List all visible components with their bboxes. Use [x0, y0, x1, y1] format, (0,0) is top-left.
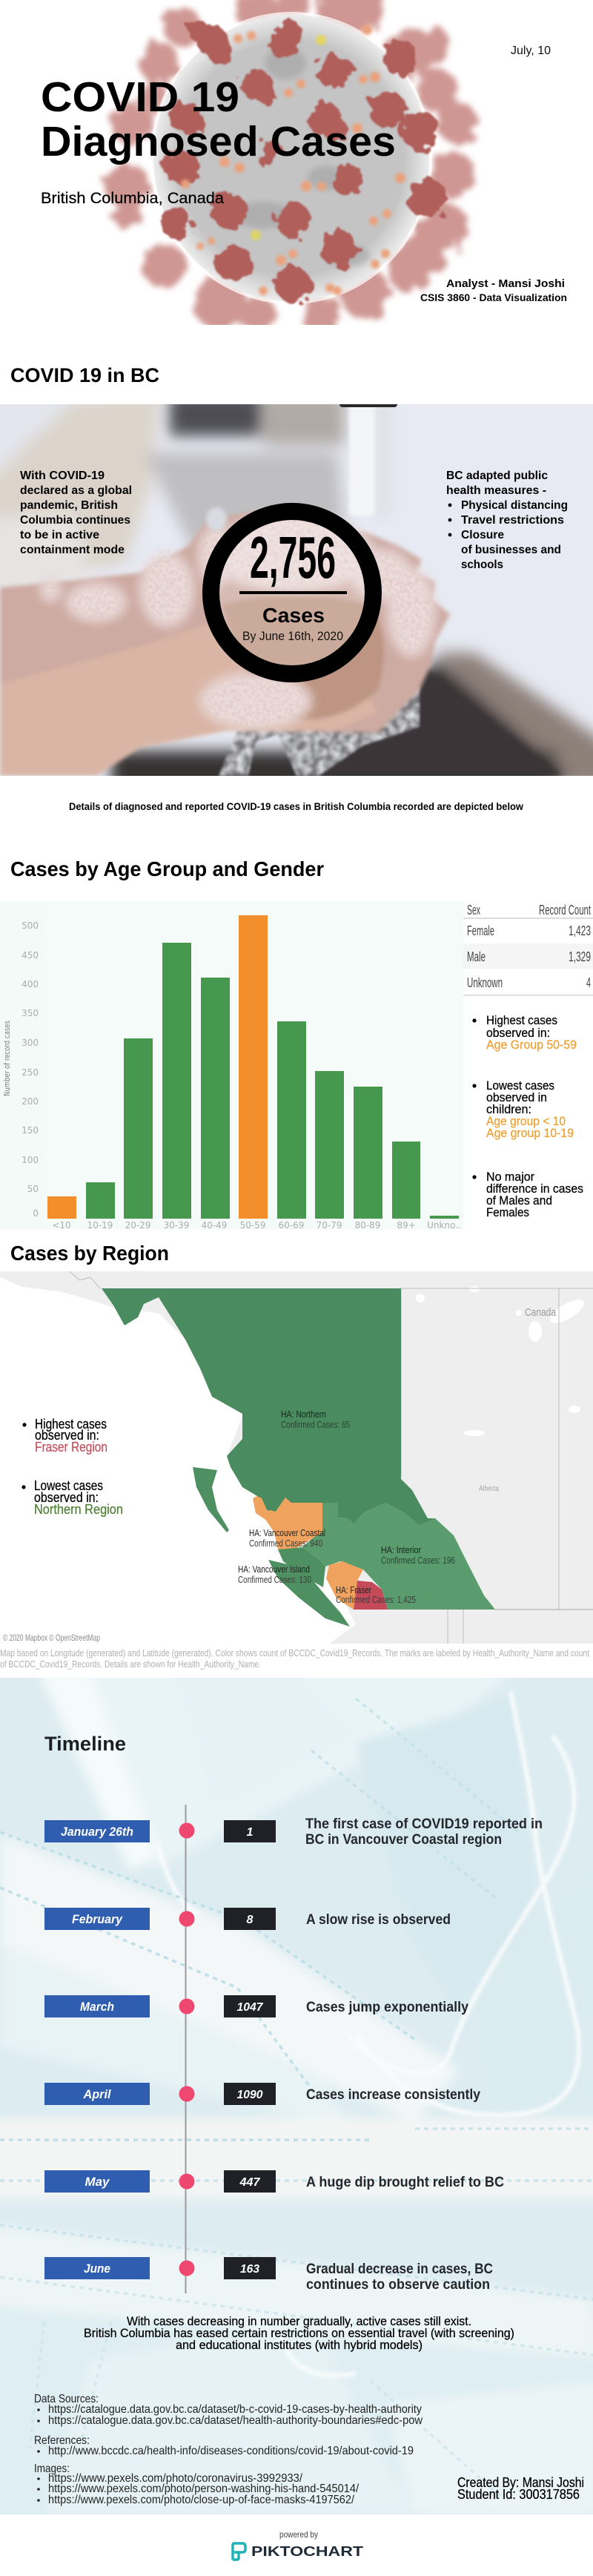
age group takeaways: observed in: [486, 1090, 547, 1104]
powered by footer: [233, 2529, 363, 2560]
hero panel: [41, 0, 567, 335]
y axis labels: 150: [21, 1125, 39, 1136]
y axis labels: 450: [21, 950, 39, 961]
closing statement: and educational institutes (with hybrid models): [176, 2338, 423, 2352]
left text block: containment mode: [20, 544, 125, 556]
age group takeaways: Highest cases: [486, 1013, 557, 1027]
closing statement: [84, 2314, 514, 2352]
x axis labels: 10-19: [87, 1220, 113, 1231]
map caption: [0, 1648, 589, 1670]
right text block: of businesses and: [461, 544, 561, 556]
row: February: February: [72, 1912, 123, 1926]
age group takeaways: Age group 10-19: [486, 1126, 574, 1140]
sources and references: http://www.bccdc.ca/health-info/diseases-conditions/covid-19/about-covid-19: [48, 2445, 414, 2457]
y axis labels: 350: [21, 1008, 39, 1018]
title: COVID 19: [41, 73, 239, 121]
map labels: Canada: [525, 1306, 557, 1319]
map labels: HA: Northern: [281, 1409, 326, 1420]
row: May: 447: [239, 2176, 261, 2189]
icon: piktochart logo: [233, 2543, 245, 2560]
age group takeaways: [473, 1013, 583, 1219]
sources and references: References:: [34, 2434, 90, 2447]
y axis labels: 100: [21, 1155, 39, 1165]
region: Fraser: [354, 1581, 388, 1610]
handwashing photo illustration: [0, 393, 593, 795]
left text block: With COVID-19: [20, 470, 105, 482]
right text block: Travel restrictions: [461, 514, 564, 527]
row: April: 1090: [237, 2089, 263, 2101]
sources and references: https://catalogue.data.gov.bc.ca/dataset/health-authority-boundaries#edc-pow: [48, 2414, 423, 2427]
bars: [47, 915, 459, 1219]
water splash: [219, 686, 420, 776]
closing statement: British Columbia has eased certain restrictions on essential travel (with screening): [84, 2326, 514, 2340]
bar chart: cases by age group: [0, 901, 463, 1231]
region takeaways: [22, 1417, 123, 1517]
x axis labels: 60-69: [279, 1220, 304, 1231]
x axis labels: 20-29: [125, 1220, 150, 1231]
map labels: Confirmed Cases: 196: [381, 1555, 455, 1566]
region: Northern: [102, 1288, 435, 1526]
age group takeaways: observed in:: [486, 1026, 550, 1040]
map labels: Confirmed Cases: 130: [238, 1575, 311, 1585]
right text block: Physical distancing: [461, 499, 568, 512]
map labels: HA: Fraser: [336, 1585, 371, 1595]
row: January: 1: [247, 1826, 254, 1839]
region takeaways: Highest cases: [35, 1417, 107, 1432]
map labels: HA: Vancouver Coastal: [249, 1528, 325, 1538]
right text block: health measures -: [446, 484, 546, 497]
author credit: [457, 2475, 584, 2502]
heading: cases by age group and gender: Cases by Age Group and Gender: [10, 857, 324, 880]
row: June: 163: [240, 2263, 259, 2276]
timeline heading: Timeline: [44, 1733, 126, 1755]
case count ring: [211, 512, 374, 673]
panel: handwashing photo with case count: [0, 393, 593, 795]
left text block: Columbia continues: [20, 514, 130, 527]
row: May: A huge dip brought relief to BC: [306, 2175, 504, 2190]
age group takeaways: No major: [486, 1170, 534, 1184]
age group takeaways: Age group < 10: [486, 1114, 566, 1128]
row: February: 8: [247, 1914, 254, 1926]
y axis labels: 50: [27, 1184, 39, 1194]
x axis labels: 80-89: [355, 1220, 380, 1231]
table: record count by sex: Female: [467, 923, 494, 938]
title: [41, 73, 396, 165]
x axis labels: Unkno..: [427, 1220, 461, 1231]
analyst credit: [420, 277, 567, 303]
hands and arms: [0, 512, 450, 776]
y axis labels: 300: [21, 1038, 39, 1048]
sources and references: https://catalogue.data.gov.bc.ca/dataset/b-c-covid-19-cases-by-health-authority: [48, 2403, 422, 2416]
map labels: HA: Vancouver Island: [238, 1564, 310, 1575]
analyst credit: CSIS 3860 - Data Visualization: [420, 292, 567, 303]
left text block: to be in active: [20, 529, 99, 541]
panel: timeline on face-mask background: [0, 1669, 593, 2522]
row: January: [44, 1816, 543, 1848]
x axis labels: 40-49: [202, 1220, 227, 1231]
left text block: [20, 470, 132, 556]
age group takeaways: children:: [486, 1102, 531, 1116]
cases label: Cases: [262, 604, 325, 627]
age group takeaways: Females: [486, 1205, 529, 1219]
region takeaways: observed in:: [34, 1490, 99, 1505]
age group takeaways: difference in cases: [486, 1182, 583, 1196]
map caption: of BCCDC_Covid19_Records. Details are shown for Health_Authority_Name.: [0, 1659, 261, 1670]
row: January: The first case of COVID19 reported in: [305, 1816, 543, 1832]
map labels: Confirmed Cases: 1,425: [336, 1595, 416, 1605]
x axis labels: [52, 1220, 461, 1231]
x axis labels: 89+: [397, 1220, 416, 1231]
row: May: [44, 2170, 504, 2193]
table: record count by sex: [463, 903, 593, 995]
face mask background illustration: [0, 1669, 593, 2522]
row: March: 1047: [237, 2001, 264, 2014]
sources and references: https://www.pexels.com/photo/person-washing-his-hand-545014/: [48, 2483, 360, 2495]
row: June: [44, 2257, 493, 2293]
region takeaways: Lowest cases: [34, 1478, 103, 1493]
sources and references: https://www.pexels.com/photo/close-up-of-face-masks-4197562/: [48, 2494, 355, 2506]
big number: 2,756: [250, 524, 336, 590]
age group takeaways: Age Group 50-59: [486, 1038, 577, 1052]
map labels: Confirmed Cases: 940: [249, 1538, 322, 1549]
map: cases by health authority: [0, 1271, 593, 1644]
row: June: Gradual decrease in cases, BC: [306, 2262, 493, 2277]
left text block: declared as a global: [20, 484, 132, 497]
region: Vancouver Island: [193, 1467, 350, 1627]
row: April: [44, 2083, 480, 2105]
row: March: Cases jump exponentially: [306, 2000, 468, 2015]
y axis labels: 200: [21, 1096, 39, 1107]
right text block: [446, 470, 568, 571]
row: April: Cases increase consistently: [306, 2087, 480, 2103]
row: January: January 26th: [61, 1825, 133, 1839]
sources and references: https://www.pexels.com/photo/coronavirus-3992933/: [48, 2472, 303, 2485]
row: February: [44, 1908, 451, 1930]
row: March: March: [80, 2000, 114, 2014]
title: Diagnosed Cases: [41, 118, 396, 165]
map labels: [3, 1306, 557, 1643]
map labels: Alberta: [479, 1485, 499, 1493]
row: February: A slow rise is observed: [306, 1912, 451, 1928]
author credit: Student Id: 300317856: [457, 2487, 580, 2502]
row: June: continues to observe caution: [306, 2277, 490, 2293]
row: March: [44, 1995, 468, 2017]
region: Vancouver Coastal: [253, 1496, 322, 1551]
x axis labels: 50-59: [240, 1220, 265, 1231]
right text block: BC adapted public: [446, 470, 548, 482]
date: July, 10: [511, 45, 551, 57]
region takeaways: Fraser Region: [35, 1440, 107, 1455]
age group takeaways: of Males and: [486, 1193, 552, 1208]
map labels: Confirmed Cases: 65: [281, 1420, 350, 1430]
table: record count by sex: Unknown: [467, 975, 503, 990]
closing statement: With cases decreasing in number gradually, active cases still exist.: [127, 2314, 471, 2328]
age group takeaways: Lowest cases: [486, 1078, 554, 1093]
row: June: June: [84, 2262, 110, 2276]
y axis labels: 500: [21, 920, 39, 931]
soap foam: [40, 514, 435, 729]
subtitle: British Columbia, Canada: [41, 190, 224, 207]
region takeaways: Northern Region: [34, 1502, 123, 1517]
row: May: May: [85, 2175, 110, 2189]
map labels: © 2020 Mapbox © OpenStreetMap: [3, 1633, 100, 1643]
powered by footer: powered by: [279, 2529, 318, 2540]
region: Interior: [302, 1503, 495, 1610]
virus illustration: [106, 0, 478, 335]
powered by footer: PIKTOCHART: [251, 2544, 363, 2559]
left text block: pandemic, British: [20, 499, 118, 512]
right text block: Closure: [461, 529, 504, 541]
table: record count by sex: Male: [467, 949, 486, 964]
sources and references: [34, 2393, 423, 2506]
heading: cases by region: Cases by Region: [10, 1242, 169, 1265]
x axis labels: <10: [52, 1220, 71, 1231]
region takeaways: observed in:: [35, 1428, 99, 1443]
map labels: HA: Interior: [381, 1545, 421, 1555]
table: record count by sex: Sex: [467, 903, 480, 918]
y axis labels: 0: [33, 1208, 39, 1219]
y axis labels: 250: [21, 1067, 39, 1078]
y axis title: Number of record cases: [3, 1021, 12, 1096]
land base: [0, 1271, 593, 1644]
y axis labels: [21, 920, 39, 1219]
date label: By June 16th, 2020: [242, 629, 343, 643]
sources and references: Data Sources:: [34, 2393, 99, 2405]
heading: COVID 19 in BC: COVID 19 in BC: [10, 364, 159, 386]
y axis labels: 400: [21, 979, 39, 989]
row: April: April: [83, 2087, 112, 2101]
sources and references: Images:: [34, 2463, 70, 2475]
intro sentence: Details of diagnosed and reported COVID-19 cases in British Columbia recorded are depicted below: [69, 801, 523, 812]
x axis labels: 70-79: [317, 1220, 342, 1231]
region: Fraser neighbours: [326, 1561, 363, 1610]
right text block: schools: [461, 559, 503, 571]
x axis labels: 30-39: [164, 1220, 189, 1231]
analyst credit: Analyst - Mansi Joshi: [446, 277, 565, 290]
row: January: BC in Vancouver Coastal region: [305, 1832, 502, 1848]
